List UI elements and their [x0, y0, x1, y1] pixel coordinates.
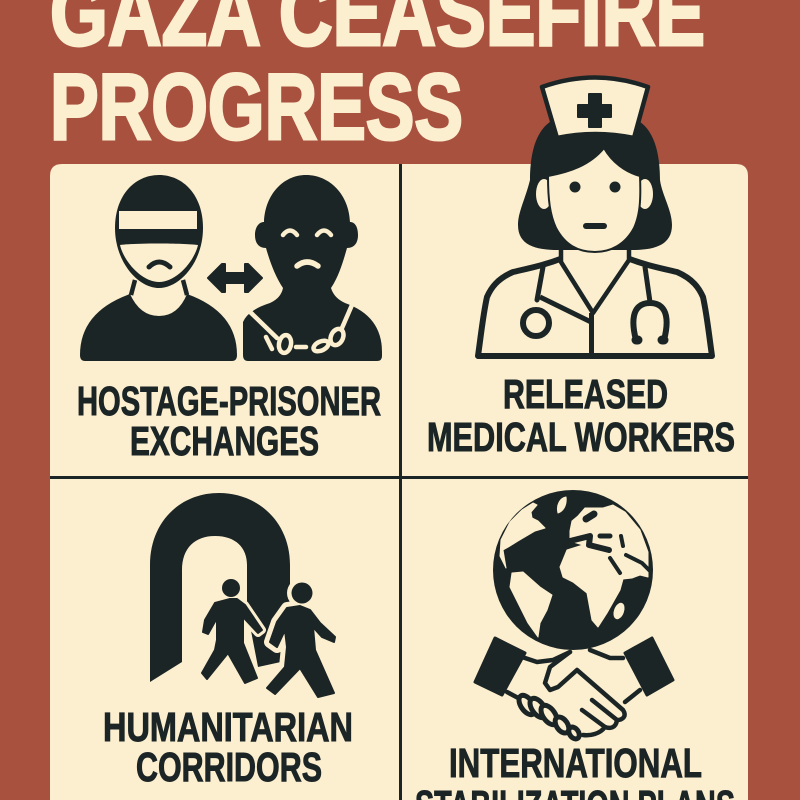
icon: hostage and prisoner	[80, 175, 382, 361]
nurse cap	[542, 78, 648, 138]
label: released medical workers	[427, 371, 735, 460]
nurse body	[478, 258, 712, 356]
stethoscope	[523, 267, 667, 340]
label: humanitarian corridors	[103, 704, 353, 790]
label: released medical workers: RELEASED	[503, 371, 668, 417]
title: PROGRESS	[50, 54, 463, 159]
nurse ears	[536, 179, 552, 209]
icon: prisoner	[243, 175, 382, 361]
panel: card grid	[50, 164, 748, 800]
icon: globe and handshake	[475, 490, 673, 741]
handshake	[475, 638, 673, 741]
tunnel arch	[150, 493, 290, 682]
label: hostage-prisoner exchanges: EXCHANGES	[130, 418, 319, 464]
icon: hostage	[80, 175, 237, 361]
nurse face	[548, 148, 640, 252]
shirt cuffs	[475, 638, 525, 695]
icon: nurse	[478, 78, 712, 356]
label: humanitarian corridors: CORRIDORS	[136, 744, 322, 790]
title	[50, 0, 705, 159]
label: international stabilization plans: INTERNATIONAL	[449, 740, 702, 786]
label: hostage-prisoner exchanges	[77, 378, 381, 464]
globe	[493, 490, 653, 650]
icon: humanitarian corridor	[150, 493, 335, 697]
label: hostage-prisoner exchanges: HOSTAGE-PRISONER	[77, 378, 381, 424]
walking person one	[202, 579, 262, 683]
icon: exchange arrow	[208, 264, 262, 292]
label: international stabilization plans	[415, 740, 735, 800]
walking person two	[267, 578, 335, 697]
label: humanitarian corridors: HUMANITARIAN	[103, 704, 353, 750]
nurse hair	[518, 120, 672, 250]
